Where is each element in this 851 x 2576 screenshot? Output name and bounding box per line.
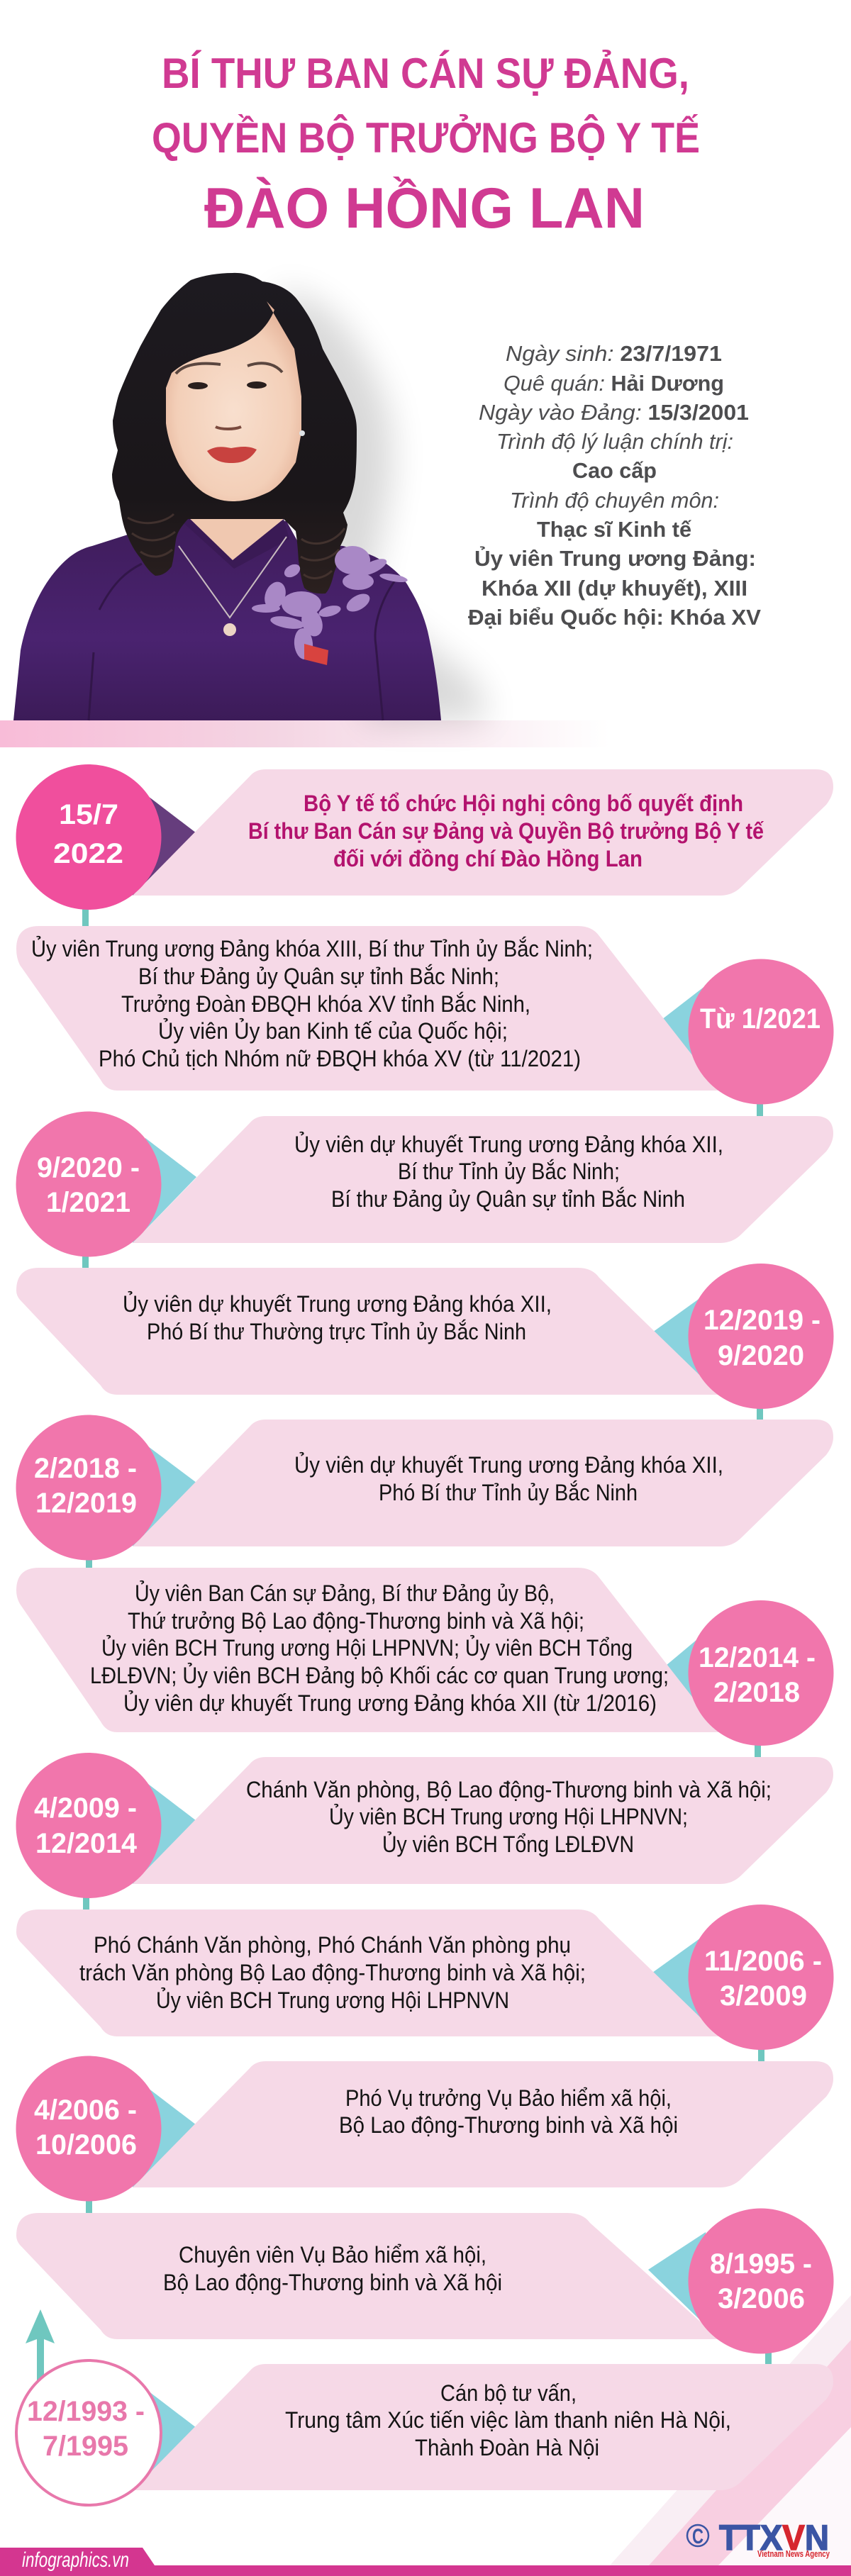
timeline row: 11/2006 - 3/2009 — [16, 1905, 834, 2050]
header gradient band — [0, 720, 610, 747]
timeline row: 12/2019 - 9/2020: Ủy viên dự khuyết Trung ương Đảng khóa XII, — [123, 1291, 552, 1317]
footer bar with site tab: infographics.vn — [22, 2548, 129, 2572]
timeline row: 4/2006 - 10/2006: 10/2006 — [35, 2129, 137, 2160]
timeline row: 12/2019 - 9/2020: Phó Bí thư Thường trực Tỉnh ủy Bắc Ninh — [147, 1319, 526, 1344]
icon: deputy flag badge — [304, 644, 328, 665]
timeline row: 12/1993 - 7/1995: Cán bộ tư vấn, — [440, 2380, 577, 2406]
timeline row: 4/2009 - 12/2014: Ủy viên BCH Trung ương Hội LHPNVN; — [329, 1804, 688, 1829]
timeline row: 4/2009 - 12/2014 — [16, 1753, 833, 1898]
logo: TTXVN: C — [692, 2525, 703, 2548]
timeline row: 12/2014 - 2/2018: Ủy viên Ban Cán sự Đảng, Bí thư Đảng ủy Bộ, — [135, 1580, 555, 1606]
title — [152, 50, 700, 240]
timeline row: 2/2018 - 12/2019: Ủy viên dự khuyết Trung ương Đảng khóa XII, — [294, 1452, 723, 1478]
timeline row: Từ 1/2021: Ủy viên Ủy ban Kinh tế của Quốc hội; — [158, 1018, 508, 1044]
timeline row: 9/2020 - 1/2021 — [16, 1112, 833, 1256]
timeline row: 11/2006 - 3/2009: trách Văn phòng Bộ Lao động-Thương binh và Xã hội; — [79, 1960, 586, 1985]
timeline row: 12/2019 - 9/2020 — [16, 1264, 834, 1409]
personal information: Ủy viên Trung ương Đảng: — [474, 545, 756, 571]
personal information: Khóa XII (dự khuyết), XIII — [482, 576, 747, 601]
personal information: Thạc sĩ Kinh tế — [537, 517, 692, 542]
personal information — [468, 341, 761, 630]
timeline row: 12/2014 - 2/2018: 2/2018 — [713, 1677, 800, 1708]
timeline row: 11/2006 - 3/2009: 11/2006 - — [704, 1946, 822, 1977]
icon: necklace and pearl — [179, 537, 287, 636]
timeline row: Từ 1/2021: Phó Chủ tịch Nhóm nữ ĐBQH khóa XV (từ 11/2021) — [99, 1046, 581, 1071]
timeline row: 15/7 2022: Bộ Y tế tổ chức Hội nghị công bố quyết định — [304, 791, 743, 816]
timeline row: Từ 1/2021: Ủy viên Trung ương Đảng khóa XIII, Bí thư Tỉnh ủy Bắc Ninh; — [31, 936, 593, 961]
timeline row: 4/2009 - 12/2014: Ủy viên BCH Tổng LĐLĐVN — [382, 1831, 634, 1857]
timeline row: 15/7 2022: 2022 — [53, 838, 123, 869]
timeline row: 12/1993 - 7/1995: Thành Đoàn Hà Nội — [415, 2435, 599, 2460]
timeline row: 15/7 2022: Bí thư Ban Cán sự Đảng và Quyền Bộ trưởng Bộ Y tế — [248, 818, 764, 844]
timeline row: 12/2019 - 9/2020: 12/2019 - — [703, 1305, 821, 1336]
timeline connectors — [82, 908, 772, 2365]
timeline row: 2/2018 - 12/2019: 12/2019 — [35, 1488, 137, 1519]
icon: facial features — [176, 363, 305, 463]
timeline row: 11/2006 - 3/2009: 3/2009 — [720, 1980, 807, 2012]
timeline row: 12/2014 - 2/2018: Thứ trưởng Bộ Lao động-Thương binh và Xã hội; — [128, 1608, 584, 1634]
timeline row: 9/2020 - 1/2021: Bí thư Đảng ủy Quân sự tỉnh Bắc Ninh — [331, 1186, 685, 1212]
personal information: Quê quán: Hải Dương — [504, 371, 724, 396]
timeline row: 4/2006 - 10/2006: Phó Vụ trưởng Vụ Bảo hiểm xã hội, — [345, 2085, 672, 2111]
timeline row: 12/2014 - 2/2018 — [16, 1568, 834, 1746]
timeline row: 2/2018 - 12/2019 — [16, 1415, 833, 1560]
timeline row: Từ 1/2021: Trưởng Đoàn ĐBQH khóa XV tỉnh Bắc Ninh, — [121, 991, 530, 1017]
personal information: Ngày vào Đảng: 15/3/2001 — [479, 400, 749, 425]
timeline row: 9/2020 - 1/2021: 9/2020 - — [37, 1152, 140, 1183]
timeline row: 15/7 2022: đối với đồng chí Đào Hồng Lan — [333, 846, 643, 871]
timeline row: 12/2019 - 9/2020: 9/2020 — [718, 1340, 804, 1371]
timeline row: 9/2020 - 1/2021: 1/2021 — [46, 1187, 130, 1218]
personal information: Cao cấp — [572, 458, 657, 483]
footer bar with site tab — [0, 2548, 851, 2576]
title: QUYỀN BỘ TRƯỞNG BỘ Y TẾ — [152, 114, 700, 162]
timeline row: 15/7 2022: 15/7 — [59, 799, 118, 830]
timeline row: 12/2014 - 2/2018: LĐLĐVN; Ủy viên BCH Đảng bộ Khối các cơ quan Trung ương; — [90, 1663, 669, 1688]
timeline row: 8/1995 - 3/2006: 8/1995 - — [710, 2248, 812, 2280]
timeline row: 11/2006 - 3/2009: Ủy viên BCH Trung ương Hội LHPNVN — [156, 1987, 509, 2013]
timeline row: 2/2018 - 12/2019: Phó Bí thư Tỉnh ủy Bắc Ninh — [379, 1480, 638, 1505]
timeline row: 12/2014 - 2/2018: Ủy viên BCH Trung ương Hội LHPNVN; Ủy viên BCH Tổng — [101, 1635, 633, 1661]
personal information: Trình độ lý luận chính trị: — [496, 429, 733, 454]
timeline row: Từ 1/2021: Bí thư Đảng ủy Quân sự tỉnh Bắc Ninh; — [138, 964, 499, 989]
timeline row: 4/2009 - 12/2014: 4/2009 - — [34, 1792, 137, 1824]
timeline row: 8/1995 - 3/2006: Bộ Lao động-Thương binh và Xã hội — [163, 2270, 502, 2295]
timeline row: 2/2018 - 12/2019: 2/2018 - — [34, 1453, 137, 1484]
timeline row: 12/2014 - 2/2018: 12/2014 - — [699, 1642, 816, 1673]
timeline row: 4/2006 - 10/2006: 4/2006 - — [34, 2095, 137, 2126]
timeline row: 8/1995 - 3/2006: 3/2006 — [718, 2283, 805, 2314]
personal information: Trình độ chuyên môn: — [510, 488, 719, 513]
icon: hair curls — [128, 514, 345, 578]
background diagonal stripes — [610, 2295, 851, 2565]
personal information: Đại biểu Quốc hội: Khóa XV — [468, 605, 761, 630]
logo: TTXVN: TTXVN — [719, 2518, 829, 2558]
timeline row: 4/2006 - 10/2006: Bộ Lao động-Thương binh và Xã hội — [339, 2112, 678, 2138]
timeline row: 12/2014 - 2/2018: Ủy viên dự khuyết Trung ương Đảng khóa XII (từ 1/2016) — [123, 1690, 657, 1716]
icon: floral embroidery — [252, 546, 408, 660]
timeline row: Từ 1/2021: Từ 1/2021 — [700, 1003, 821, 1035]
timeline row: 9/2020 - 1/2021: Bí thư Tỉnh ủy Bắc Ninh; — [398, 1159, 620, 1184]
timeline row: 4/2006 - 10/2006 — [16, 2056, 833, 2201]
timeline row: 15/7 2022 — [16, 764, 833, 910]
timeline row: 12/1993 - 7/1995: 7/1995 — [43, 2431, 128, 2462]
timeline row: 12/1993 - 7/1995: Trung tâm Xúc tiến việc làm thanh niên Hà Nội, — [285, 2407, 731, 2433]
timeline row: 4/2009 - 12/2014: 12/2014 — [35, 1828, 138, 1859]
timeline row: Từ 1/2021 — [16, 926, 834, 1105]
timeline row: 12/1993 - 7/1995: 12/1993 - — [27, 2396, 145, 2427]
timeline row: 11/2006 - 3/2009: Phó Chánh Văn phòng, Phó Chánh Văn phòng phụ — [94, 1932, 571, 1958]
arrow: timeline direction — [26, 2309, 55, 2382]
timeline row: 12/1993 - 7/1995 — [16, 2360, 833, 2505]
timeline row: 8/1995 - 3/2006: Chuyên viên Vụ Bảo hiểm xã hội, — [179, 2242, 486, 2268]
title: BÍ THƯ BAN CÁN SỰ ĐẢNG, — [162, 50, 689, 97]
timeline row: 9/2020 - 1/2021: Ủy viên dự khuyết Trung ương Đảng khóa XII, — [294, 1132, 723, 1157]
personal information: Ngày sinh: 23/7/1971 — [506, 341, 722, 366]
timeline row: 8/1995 - 3/2006 — [16, 2208, 834, 2354]
timeline row: 4/2009 - 12/2014: Chánh Văn phòng, Bộ Lao động-Thương binh và Xã hội; — [246, 1777, 772, 1802]
portrait photo — [13, 273, 489, 720]
title: ĐÀO HỒNG LAN — [204, 176, 645, 240]
